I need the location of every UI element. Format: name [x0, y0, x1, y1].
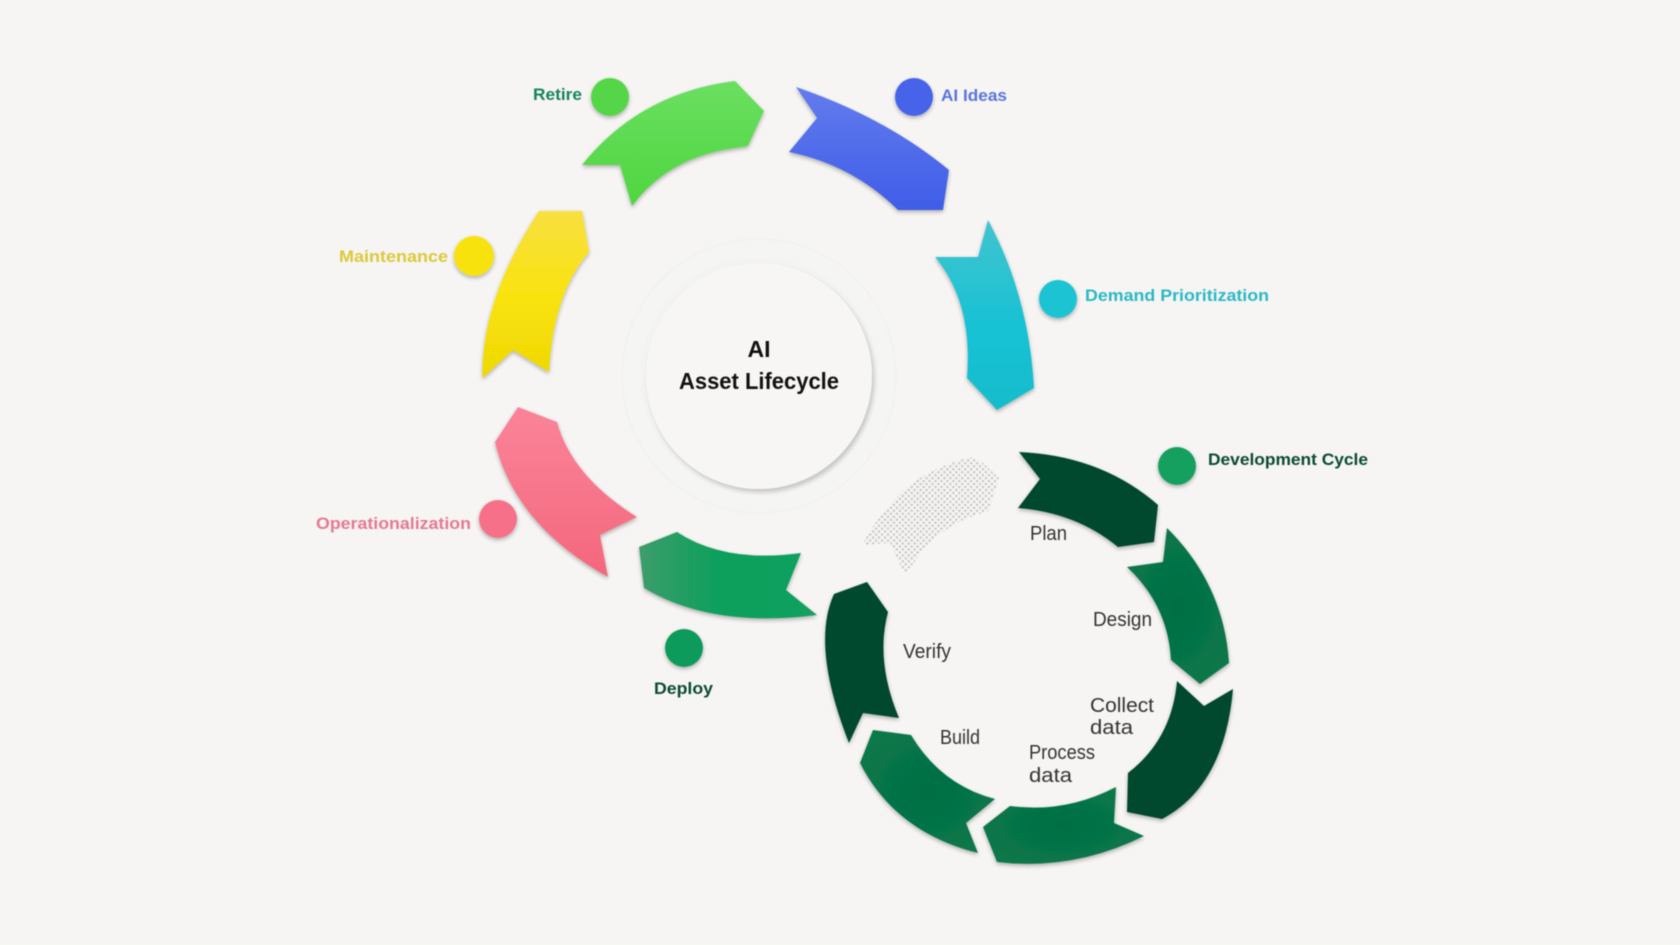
- arrow: Collect data: [1127, 681, 1233, 819]
- arrow: Retire: [582, 81, 764, 206]
- label: Build: Build: [940, 727, 980, 749]
- label: Collect data: [1090, 695, 1154, 739]
- marker: Operationalization: [316, 500, 517, 538]
- arrow: AI Ideas: [789, 87, 949, 210]
- label: Process data: [1029, 742, 1095, 787]
- marker: Maintenance: [339, 236, 494, 276]
- arrow: Maintenance: [482, 211, 589, 378]
- arrow: faded dotted segment: [862, 457, 999, 575]
- marker: Retire: [533, 78, 629, 116]
- marker: Demand Prioritization: [1039, 280, 1269, 318]
- label: Design: Design: [1093, 609, 1152, 631]
- center hub: [622, 239, 896, 513]
- label: Process data: data: [1029, 765, 1073, 787]
- arrow: Operationalization: [495, 407, 637, 577]
- arrow: Design: [1127, 528, 1229, 684]
- marker: Development Cycle: Development Cycle: [1208, 450, 1368, 469]
- marker: AI Ideas: [895, 78, 1007, 116]
- arrow: Demand Prioritization: [935, 220, 1034, 410]
- marker: Retire: Retire: [533, 85, 582, 104]
- marker: Maintenance: Maintenance: [339, 247, 448, 266]
- arrow: Process data: [983, 787, 1144, 864]
- marker: Operationalization: Operationalization: [316, 514, 471, 533]
- marker: Development Cycle: [1158, 447, 1368, 485]
- development cycle ring: [825, 452, 1233, 864]
- label: Collect data: Collect: [1090, 695, 1154, 717]
- label: Verify: Verify: [903, 641, 951, 663]
- title: [679, 336, 839, 394]
- label: Process data: Process: [1029, 742, 1095, 764]
- arrow: Plan: [1018, 452, 1158, 547]
- label: Collect data: data: [1090, 717, 1134, 739]
- arrow: Build: [860, 730, 995, 853]
- marker: Demand Prioritization: Demand Prioritization: [1085, 286, 1269, 305]
- marker: Deploy: Deploy: [654, 679, 714, 698]
- arrow: Deploy: [639, 532, 817, 618]
- arrow: Verify: [825, 582, 899, 743]
- title: Asset Lifecycle: [679, 368, 839, 394]
- label: Plan: Plan: [1030, 523, 1067, 545]
- marker: AI Ideas: AI Ideas: [941, 86, 1007, 105]
- title: AI: [748, 336, 770, 362]
- marker: Deploy: [654, 629, 714, 698]
